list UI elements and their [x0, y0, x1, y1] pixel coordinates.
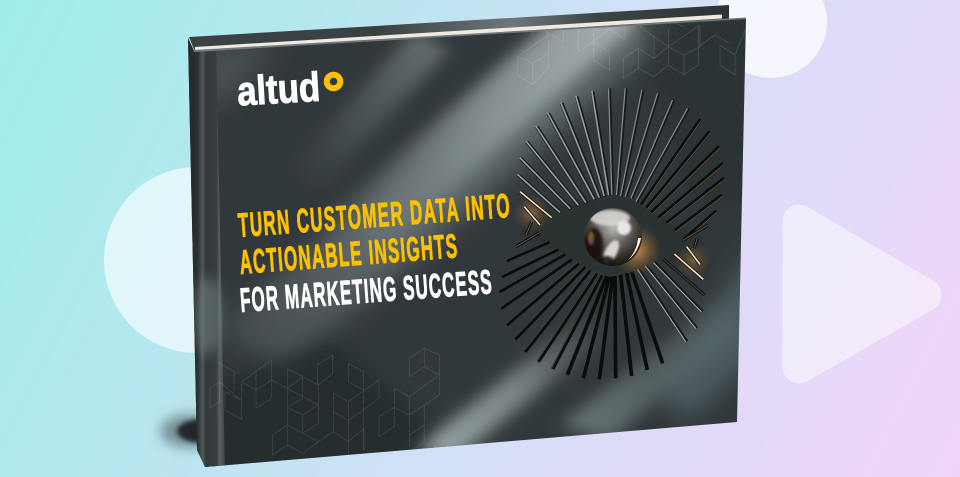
spine highlight [194, 276, 222, 356]
glow: right highlights [678, 244, 709, 276]
circle: top right decorative [715, 0, 827, 78]
eye illustration [498, 88, 725, 379]
glow: left highlights [516, 198, 548, 230]
title [237, 193, 510, 312]
eye socket [524, 196, 706, 276]
cover base [180, 10, 760, 477]
spokes: top right [642, 119, 725, 241]
icon: play triangle [799, 221, 925, 367]
spokes: top left [517, 91, 609, 213]
spokes [498, 88, 725, 379]
back cover [189, 5, 729, 52]
front cover top rim [194, 18, 746, 52]
cube pattern: bottom left [210, 348, 439, 455]
spokes: gold accents [516, 192, 708, 279]
cover light streaks [201, 22, 746, 467]
spine [186, 38, 225, 470]
book shadow [160, 414, 229, 448]
spokes: bottom right [637, 259, 704, 342]
book [180, 0, 760, 477]
logo ring [327, 75, 340, 88]
logo [238, 70, 344, 106]
title line 2: ACTIONABLE INSIGHTS [238, 227, 458, 282]
circle: left decorative [104, 167, 290, 353]
logo wordmark: altud [236, 64, 321, 114]
metal sphere [584, 208, 642, 266]
glow behind sphere [619, 228, 659, 274]
cube pattern: top [517, 23, 746, 84]
front cover [180, 0, 760, 477]
title line 1: TURN CUSTOMER DATA INTO [237, 187, 511, 245]
spokes: top [608, 88, 688, 202]
title line 3: FOR MARKETING SUCCESS [239, 263, 493, 320]
spokes: bottom [498, 241, 663, 379]
page block [195, 14, 722, 51]
